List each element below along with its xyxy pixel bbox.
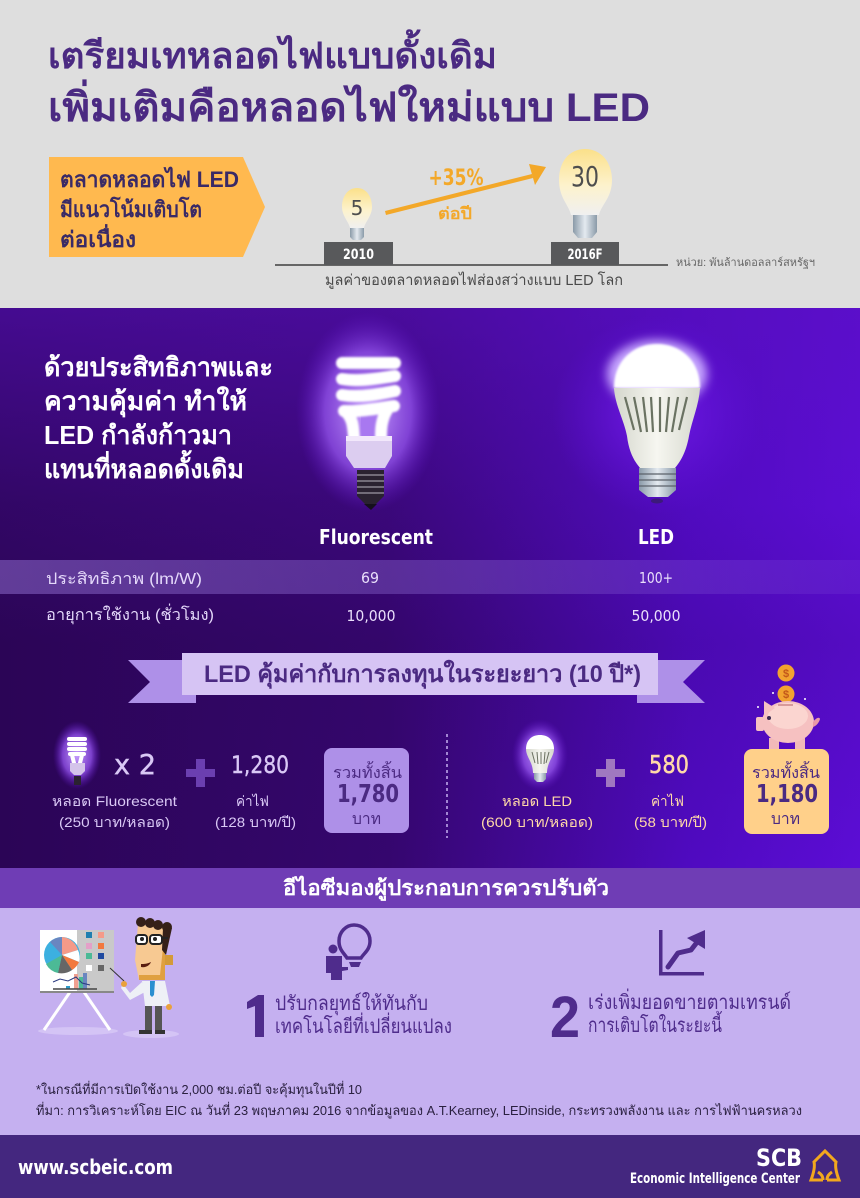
logo: SCB wordmark [630, 1144, 802, 1187]
presenter [121, 917, 173, 1034]
cost breakdown: LED: 580 [649, 750, 689, 779]
icon: small fluorescent bulb [53, 721, 101, 789]
icon: piggy bank with coins: $ [783, 668, 789, 680]
total box: LED: บาท [771, 811, 800, 828]
title: เตรียมเทหลอดไฟแบบดั้งเดิม [48, 29, 497, 76]
table row: lifetime: อายุการใช้งาน (ชั่วโมง) [46, 603, 214, 625]
unit note: หน่วย: พันล้านดอลลาร์สหรัฐฯ [676, 256, 815, 269]
table row: lifetime: 10,000 [346, 607, 396, 625]
year label 2016F: 2016F [568, 247, 602, 263]
icon: piggy bank with coins [756, 664, 820, 750]
growth label: ต่อปี [438, 204, 472, 223]
icon: plus [186, 759, 215, 787]
table row: efficiency [0, 560, 860, 594]
cost breakdown: fluorescent: x 2 [114, 748, 156, 781]
growth label [428, 166, 484, 223]
table row: efficiency: 100+ [639, 569, 673, 587]
footnotes and source: ที่มา: การวิเคราะห์โดย EIC ณ วันที่ 23 พฤษภาคม 2016 จากข้อมูลของ A.T.Kearney, LEDinside, กระทรวงพลังงาน และ การไฟฟ้านครหลวง [36, 1102, 802, 1119]
divider: dashed [446, 734, 448, 838]
recommendation 2: เร่งเพิ่มยอดขายตามเทรนด์ [588, 988, 791, 1014]
icon: small LED bulb [512, 719, 568, 791]
ribbon heading: LED คุ้มค่ากับการลงทุนในระยะยาว (10 ปี*) [204, 659, 641, 690]
cost breakdown: fluorescent [52, 721, 409, 833]
title [48, 29, 650, 130]
icon: LED bulb [552, 315, 762, 515]
title: เพิ่มเติมคือหลอดไฟใหม่แบบ LED [48, 79, 650, 130]
heading: efficiency statement: ด้วยประสิทธิภาพและ [44, 352, 273, 382]
year label 2016F [551, 242, 619, 265]
footnotes and source [36, 1081, 802, 1119]
total box: fluorescent: รวมทั้งสิ้น [333, 761, 402, 782]
ribbon heading [128, 653, 705, 703]
heading: efficiency statement: ความคุ้มค่า ทำให้ [44, 386, 247, 418]
cost breakdown: fluorescent: ค่าไฟ [236, 793, 269, 809]
icon: large bulb 2016F [559, 149, 612, 238]
panel: footer [0, 1135, 860, 1198]
comparison column headings: LED [638, 525, 674, 549]
comparison column headings [319, 525, 674, 549]
icon: growth chart [659, 930, 705, 976]
panel: EIC view header: อีไอซีมองผู้ประกอบการควรปรับตัว [283, 875, 609, 902]
total box: LED: รวมทั้งสิ้น [752, 761, 820, 782]
cost breakdown: LED [481, 664, 829, 834]
logo: SCB wordmark: Economic Intelligence Center [630, 1171, 800, 1187]
cost breakdown: LED: (58 บาท/ปี) [634, 814, 707, 830]
total box: fluorescent [324, 748, 409, 833]
panel: purple comparison background [0, 308, 860, 868]
icon: fluorescent bulb [296, 312, 440, 512]
recommendation 1 [247, 992, 452, 1038]
callout: LED market trend: มีแนวโน้มเติบโต [60, 196, 202, 222]
cost breakdown: fluorescent: (250 บาท/หลอด) [59, 814, 170, 830]
heading: efficiency statement: LED กำลังก้าวมา [44, 420, 232, 450]
comparison column headings: Fluorescent [319, 525, 433, 549]
logo: SCB wordmark: SCB [756, 1144, 802, 1172]
website: www.scbeic.com [18, 1155, 173, 1179]
callout: LED market trend: ต่อเนื่อง [60, 223, 136, 252]
icon: person with idea bulb [326, 925, 370, 980]
footnotes and source: *ในกรณีที่มีการเปิดใช้งาน 2,000 ชม.ต่อปี จะคุ้มทุนในปีที่ 10 [36, 1081, 362, 1098]
cost breakdown: LED: ค่าไฟ [651, 793, 684, 809]
panel: recommendations background [0, 908, 860, 1135]
recommendation 2 [550, 985, 791, 1050]
growth label: +35% [428, 166, 484, 191]
recommendation 2: การเติบโตในระยะนี้ [588, 1011, 722, 1037]
recommendation 2: 2 [550, 985, 580, 1050]
panel: EIC view header [0, 868, 860, 908]
chart caption: มูลค่าของตลาดหลอดไฟส่องสว่างแบบ LED โลก [325, 271, 623, 289]
cost breakdown: fluorescent: 1,280 [231, 751, 289, 779]
table row: lifetime [46, 603, 680, 625]
heading: efficiency statement [44, 352, 273, 484]
icon: small bulb 2010 [342, 188, 372, 240]
heading: efficiency statement: แทนที่หลอดดั้งเดิม [44, 449, 244, 484]
icon: small bulb 2010: 5 [351, 196, 363, 220]
year label 2010: 2010 [343, 247, 374, 263]
total box: LED: 1,180 [756, 779, 818, 808]
panel: grey header background [0, 0, 860, 308]
icon: plus [596, 759, 625, 787]
cost breakdown: LED: หลอด LED [502, 793, 572, 809]
table row: efficiency: ประสิทธิภาพ (lm/W) [46, 571, 202, 588]
cost breakdown: LED: (600 บาท/หลอด) [481, 814, 593, 830]
recommendation 1: เทคโนโลยีที่เปลี่ยนแปลง [275, 1012, 452, 1038]
icon: piggy bank with coins: $ [783, 689, 789, 701]
table row: lifetime: 50,000 [632, 607, 680, 625]
icon: large bulb 2016F: 30 [571, 160, 599, 193]
callout: LED market trend [49, 157, 265, 257]
arrow: growth [385, 164, 546, 215]
recommendation 1: ปรับกลยุทธ์ให้ทันกับ [275, 992, 428, 1016]
year label 2010 [324, 242, 393, 265]
total box: LED [744, 749, 829, 834]
total box: fluorescent: บาท [352, 811, 381, 828]
cost breakdown: fluorescent: หลอด Fluorescent [52, 793, 177, 809]
table row: efficiency: 69 [361, 569, 379, 587]
chart: market growth 2010 to 2016F [275, 149, 815, 289]
cost breakdown: fluorescent: (128 บาท/ปี) [215, 814, 296, 830]
callout: LED market trend: ตลาดหลอดไฟ LED [60, 166, 239, 192]
total box: fluorescent: 1,780 [337, 779, 399, 808]
icon: SCB logo mark [811, 1151, 839, 1180]
illustration: presenter with chart board [38, 917, 179, 1038]
